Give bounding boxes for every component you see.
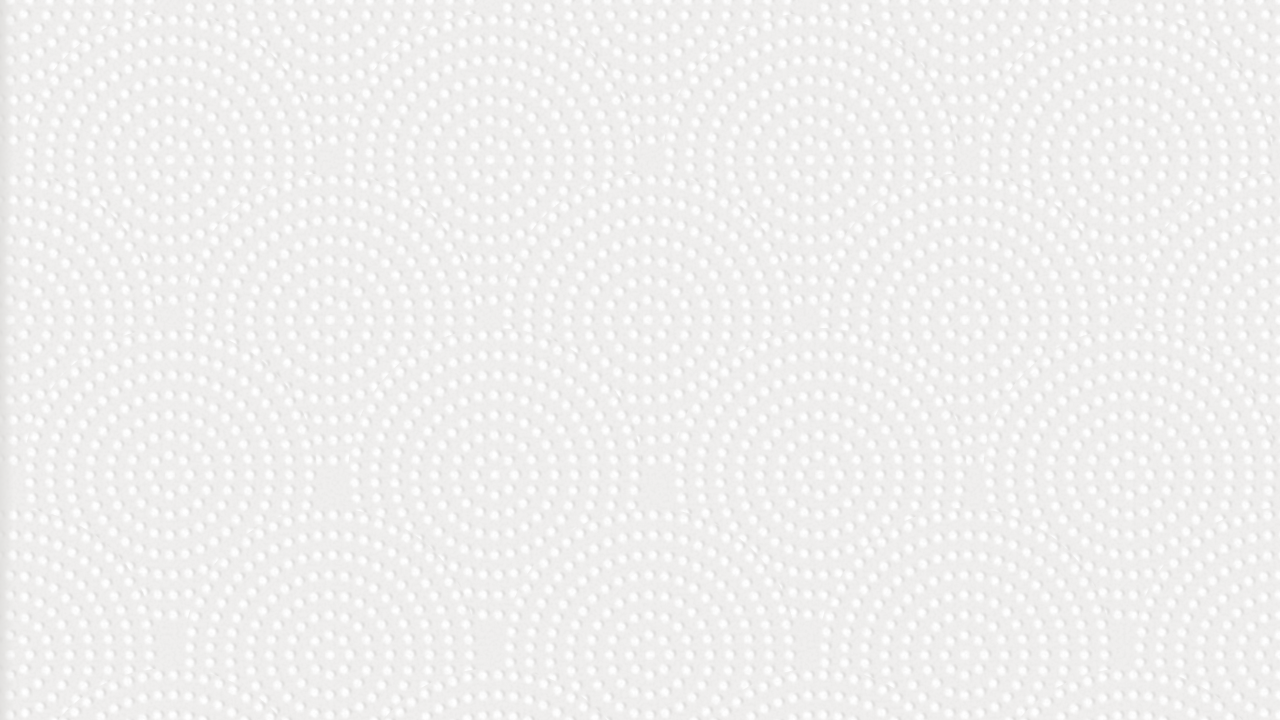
scallop row 0: [0, 0, 1280, 147]
scallop row 3: [23, 328, 1277, 622]
scallop row 4: [0, 508, 1280, 720]
shaded left paper edge: [0, 0, 14, 720]
scallop row 1: [23, 13, 1272, 307]
scallop row 5: [23, 668, 1277, 720]
scallop row 2: [0, 173, 1280, 467]
